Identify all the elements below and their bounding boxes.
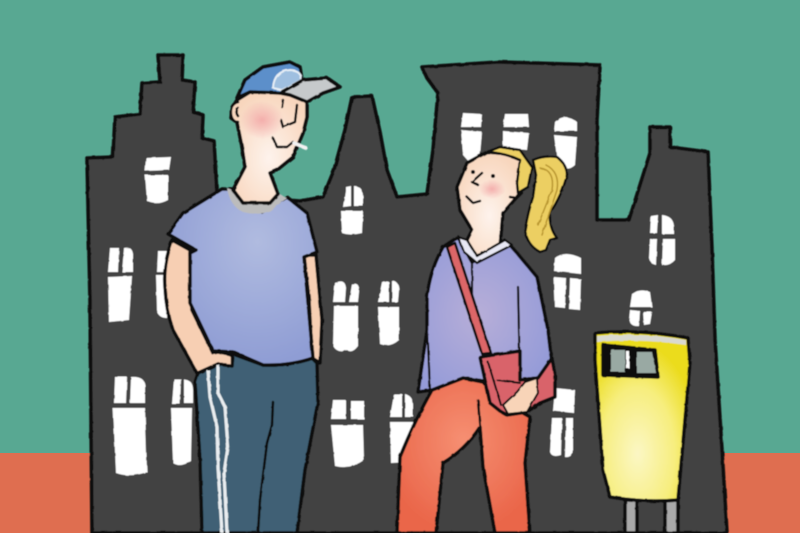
woman: blush — [479, 179, 505, 199]
background: pavement — [0, 453, 800, 533]
man: trouser stripes — [208, 365, 228, 533]
bin: lid strip — [597, 335, 686, 345]
woman: ponytail — [525, 156, 567, 252]
bin: opening — [603, 345, 658, 377]
woman: bag strap — [447, 243, 491, 354]
man: trouser crease — [258, 402, 273, 533]
man: cigarette — [294, 143, 306, 148]
man: collar — [227, 188, 287, 214]
woman: bag — [480, 351, 555, 415]
person: man — [165, 62, 340, 533]
litter bin — [595, 332, 690, 533]
silhouette: canal houses — [87, 55, 727, 533]
woman: ponytail strands — [538, 165, 558, 235]
woman: face details — [467, 173, 522, 203]
woman: sweater — [418, 237, 553, 392]
man: neck and head — [231, 90, 307, 203]
woman: hand — [503, 378, 538, 414]
woman: collar — [458, 237, 512, 263]
bin: window panes — [611, 350, 656, 373]
windows: white house windows — [108, 113, 675, 475]
woman: sweater seams — [427, 263, 520, 390]
man: t-shirt — [168, 189, 317, 365]
man: cap — [237, 62, 302, 98]
bin: legs — [625, 498, 678, 533]
woman: trousers — [397, 378, 530, 533]
man: cap badge — [273, 70, 301, 90]
man: cap visor — [280, 78, 340, 102]
man: right arm — [304, 255, 322, 363]
man: left arm — [165, 240, 232, 375]
man: face details — [273, 100, 297, 147]
man: ear — [231, 102, 238, 122]
man: trousers — [195, 354, 318, 533]
bin: pane divider — [626, 351, 629, 368]
scene artwork — [87, 55, 727, 533]
woman: neck and head — [457, 152, 522, 258]
man: blush — [240, 101, 284, 139]
woman: trouser crease — [478, 400, 480, 427]
person: woman — [397, 147, 567, 533]
woman: hair — [487, 147, 532, 193]
woman: bag flap lines — [488, 362, 520, 405]
bin: body — [595, 332, 690, 501]
